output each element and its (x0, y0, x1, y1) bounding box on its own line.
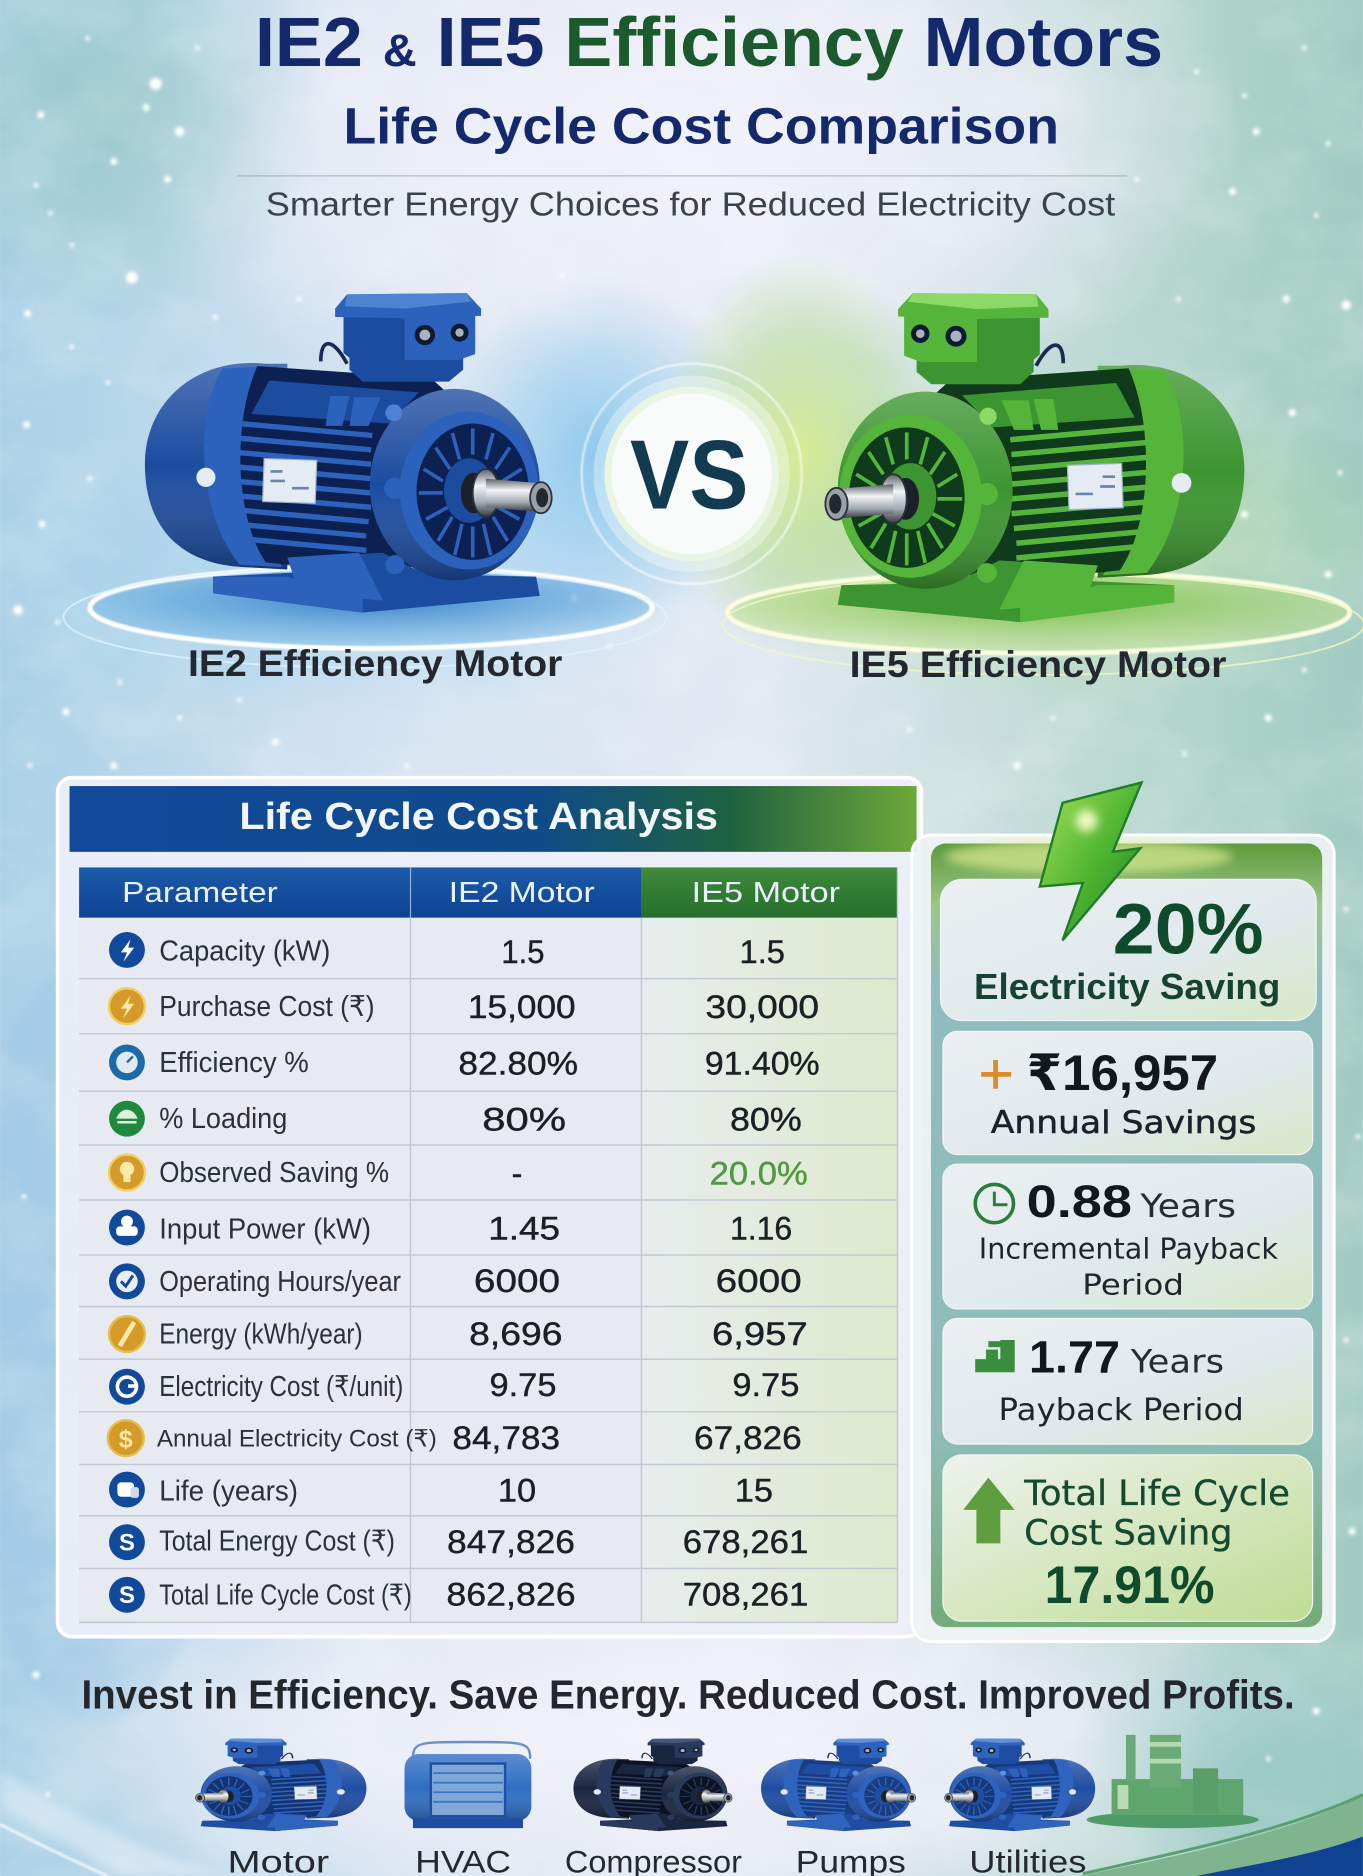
table header: IE2 Motor (449, 877, 595, 909)
icon: lightning bolt (1040, 782, 1142, 940)
icon: HVAC (405, 1742, 531, 1828)
row: total energy cost: 847,826 (447, 1524, 575, 1560)
card: payback period: Payback Period (999, 1393, 1244, 1428)
row: operating hours: Operating Hours/year (159, 1266, 401, 1298)
row: input power (109, 1210, 792, 1247)
card: incremental payback: 0.88 (1027, 1176, 1132, 1227)
label: IE5 motor: IE5 Efficiency Motor (850, 643, 1226, 685)
table header: Parameter (122, 877, 278, 909)
heading: main title: IE2 & IE5 Efficiency Motors (255, 3, 1163, 81)
row: loading: 80% (730, 1102, 802, 1138)
row: operating hours: 6000 (474, 1263, 560, 1299)
motor: IE5 green (825, 293, 1244, 622)
tagline: Smarter Energy Choices for Reduced Electricity Cost (266, 186, 1116, 223)
panel: key savings (912, 782, 1334, 1642)
icon: clock (975, 1184, 1014, 1223)
row: efficiency (109, 1044, 820, 1081)
icon: plus (981, 1060, 1011, 1089)
row: loading: 80% (482, 1102, 566, 1138)
row: efficiency: 82.80% (458, 1045, 578, 1081)
row: observed saving: 20.0% (710, 1155, 808, 1191)
row: total life cycle cost (109, 1577, 808, 1613)
row: electricity cost: Electricity Cost (₹/unit) (159, 1371, 403, 1403)
row: life: 10 (498, 1473, 536, 1509)
icon: utilities (945, 1738, 1095, 1831)
row: energy: Energy (kWh/year) (159, 1319, 363, 1351)
icon: motor (196, 1738, 366, 1831)
application labels (227, 1844, 1086, 1876)
row: total energy cost: 678,261 (683, 1524, 808, 1560)
icon: pumps (761, 1738, 916, 1831)
row: operating hours: 6000 (716, 1263, 802, 1299)
icon: compressor (573, 1738, 732, 1831)
VS badge (582, 364, 802, 584)
row: annual electricity cost: $ (119, 1426, 133, 1454)
table header: IE5 Motor (692, 877, 841, 909)
card: payback period: Years (1130, 1342, 1224, 1380)
row: purchase cost: Purchase Cost (₹) (159, 991, 375, 1023)
panel: life cycle cost analysis (58, 778, 921, 1637)
row: loading (109, 1101, 802, 1138)
card: annual savings: ₹16,957 (1027, 1045, 1218, 1101)
card: annual savings (943, 1031, 1313, 1155)
panel header: Life Cycle Cost Analysis (239, 795, 718, 838)
table header (79, 867, 897, 918)
card: total life cycle cost saving: Total Life Cycle (1023, 1474, 1290, 1514)
row: annual electricity cost: 67,826 (694, 1420, 802, 1456)
card: total life cycle cost saving: Cost Saving (1024, 1514, 1232, 1554)
card: electricity saving (941, 879, 1316, 1021)
table (79, 867, 897, 1622)
card: electricity saving: Electricity Saving (974, 967, 1280, 1007)
row: efficiency: 91.40% (705, 1045, 820, 1081)
card: total life cycle cost saving (943, 1455, 1313, 1621)
row: capacity: 1.5 (740, 934, 785, 970)
card: payback period (943, 1318, 1313, 1444)
row: life: 15 (735, 1473, 773, 1509)
row: electricity cost: 9.75 (732, 1367, 799, 1403)
row: total life cycle cost: S (119, 1582, 135, 1609)
row: total energy cost: S (119, 1530, 135, 1557)
row: electricity cost: 9.75 (489, 1367, 556, 1403)
row: loading: % Loading (159, 1103, 287, 1135)
VS badge: VS (630, 419, 748, 529)
row: operating hours (109, 1263, 802, 1299)
bottom swoosh (0, 1771, 1363, 1876)
row: purchase cost: 15,000 (468, 989, 576, 1025)
card: incremental payback: Period (1082, 1268, 1184, 1302)
icon: factory (1086, 1735, 1259, 1828)
row: input power: 1.45 (488, 1211, 560, 1247)
closing tagline: Invest in Efficiency. Save Energy. Reduced Cost. Improved Profits. (81, 1672, 1295, 1718)
row: total life cycle cost: 708,261 (683, 1577, 808, 1613)
row: electricity cost (109, 1367, 799, 1405)
row: annual electricity cost: Annual Electricity Cost (₹) (157, 1425, 437, 1452)
icon: green bars (975, 1340, 1015, 1372)
row: capacity: 1.5 (501, 934, 545, 970)
card: incremental payback: Incremental Payback (979, 1232, 1278, 1266)
application icons (196, 1735, 1259, 1831)
row: life: Life (years) (159, 1475, 298, 1507)
row: observed saving (109, 1155, 808, 1191)
label: IE2 motor: IE2 Efficiency Motor (188, 642, 562, 684)
row: capacity (109, 932, 785, 970)
row: input power: 1.16 (730, 1211, 792, 1247)
row: input power: Input Power (kW) (159, 1213, 371, 1245)
row: observed saving: - (512, 1155, 522, 1191)
card: payback period: 1.77 (1029, 1331, 1120, 1382)
row: observed saving: Observed Saving % (159, 1157, 389, 1189)
glow ring: IE5 motor base (723, 572, 1363, 675)
row: total energy cost: Total Energy Cost (₹) (159, 1526, 395, 1558)
motor: IE2 blue (145, 293, 552, 613)
row: total life cycle cost: Total Life Cycle Cost (₹) (159, 1579, 412, 1611)
row: total energy cost (109, 1524, 808, 1560)
row: purchase cost: 30,000 (705, 989, 819, 1025)
title (237, 3, 1163, 223)
row: annual electricity cost (108, 1420, 802, 1456)
card: incremental payback (943, 1164, 1313, 1309)
row: energy: 8,696 (469, 1316, 562, 1352)
row: capacity: Capacity (kW) (159, 936, 330, 968)
row: energy (109, 1316, 808, 1352)
row: total life cycle cost: 862,826 (446, 1577, 576, 1613)
glow ring: IE2 motor base (64, 567, 667, 668)
row: energy: 6,957 (712, 1316, 808, 1352)
icon: up arrow (963, 1478, 1015, 1543)
row: life (109, 1472, 773, 1509)
panel header (70, 786, 917, 852)
card: total life cycle cost saving: 17.91% (1045, 1556, 1215, 1615)
card: electricity saving: 20% (1113, 890, 1264, 970)
heading: subtitle: Life Cycle Cost Comparison (344, 97, 1059, 155)
row: annual electricity cost: 84,783 (452, 1420, 560, 1456)
card: incremental payback: Years (1139, 1187, 1236, 1225)
card: annual savings: Annual Savings (991, 1105, 1256, 1141)
row: purchase cost (109, 988, 819, 1025)
row: efficiency: Efficiency % (159, 1047, 309, 1079)
